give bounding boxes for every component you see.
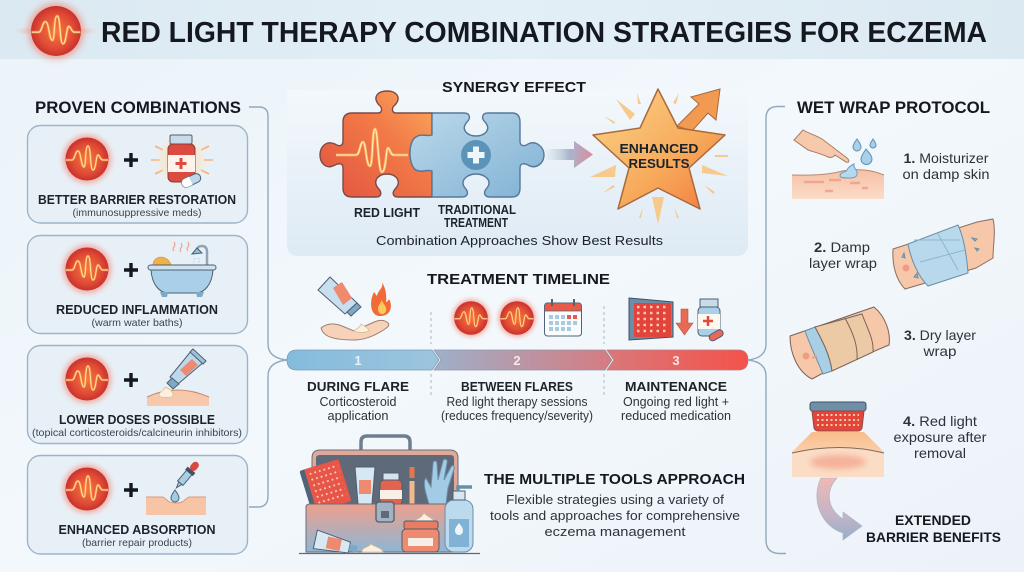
- icon: star with enhanced results: [590, 89, 728, 224]
- arrow: curved to extended benefits: [817, 478, 862, 540]
- step 1: moisturizer: 1. Moisturizer: [904, 150, 989, 166]
- heading: wet wrap protocol: WET WRAP PROTOCOL: [797, 99, 990, 117]
- step 4: red light exposure: [792, 402, 987, 477]
- icon: toolbox of treatments: [299, 436, 480, 558]
- card: lower doses possible: LOWER DOSES POSSIBLE: [59, 412, 215, 427]
- heading: treatment timeline: TREATMENT TIMELINE: [427, 271, 610, 288]
- step 4: red light exposure: exposure after: [894, 429, 987, 445]
- card: reduced inflammation: REDUCED INFLAMMATION: [56, 302, 218, 317]
- timeline stage: maintenance: reduced medication: [621, 409, 731, 423]
- icon: star with enhanced results: RESULTS: [628, 156, 690, 171]
- panel: synergy effect: [287, 79, 748, 256]
- label: traditional treatment: [438, 202, 516, 230]
- icon: blue puzzle piece: [410, 113, 544, 197]
- text block: multiple tools approach: tools and approaches for comprehensive: [490, 509, 740, 523]
- text block: multiple tools approach: [484, 471, 745, 539]
- card: reduced inflammation: (warm water baths): [92, 317, 182, 329]
- arrow: to enhanced results: [546, 141, 593, 168]
- step 3: dry layer wrap: wrap: [922, 343, 957, 359]
- timeline stage: maintenance: [621, 379, 731, 423]
- heading: synergy effect: SYNERGY EFFECT: [442, 79, 586, 96]
- timeline stage: during flare: [307, 379, 409, 423]
- icon: cream tube on skin: [147, 349, 209, 406]
- timeline bar: 1: [354, 353, 362, 368]
- icon: red light logo: [19, 3, 93, 59]
- separators: [431, 306, 604, 398]
- card: better barrier restoration: (immunosuppressive meds): [72, 207, 202, 219]
- heading: proven combinations: PROVEN COMBINATIONS: [35, 99, 241, 117]
- step 2: damp layer wrap: 2. Damp: [814, 239, 870, 255]
- step 1: moisturizer: [792, 130, 990, 199]
- icon: hand with tube and flame: [318, 277, 391, 340]
- card: lower doses possible: (topical corticosteroids/calcineurin inhibitors): [32, 427, 242, 439]
- timeline bar: [287, 350, 748, 370]
- timeline stage: during flare: Corticosteroid: [320, 395, 397, 409]
- icon: dropper on skin: [146, 459, 206, 515]
- timeline stage: between flares: (reduces frequency/severity): [441, 409, 593, 423]
- callout: extended barrier benefits: [866, 512, 1001, 545]
- text block: multiple tools approach: THE MULTIPLE TOOLS APPROACH: [484, 471, 745, 488]
- timeline stage: during flare: DURING FLARE: [307, 379, 409, 394]
- timeline bar: 2: [513, 353, 521, 368]
- step 4: red light exposure: removal: [914, 445, 966, 461]
- panel: proven combinations: [28, 99, 248, 554]
- connector: left bracket: [249, 107, 287, 507]
- icon: medicine bottle: [151, 135, 213, 189]
- step 1: moisturizer: on damp skin: [902, 166, 990, 182]
- icon: red puzzle piece: [320, 91, 432, 197]
- text block: multiple tools approach: eczema management: [544, 525, 686, 539]
- callout: extended barrier benefits: EXTENDED: [895, 512, 971, 528]
- card: better barrier restoration: BETTER BARRIER RESTORATION: [38, 192, 236, 207]
- timeline stage: between flares: Red light therapy sessions: [446, 395, 588, 409]
- panel: wet wrap protocol: [790, 99, 1001, 545]
- timeline bar: 3: [672, 353, 680, 368]
- header band: [0, 0, 1024, 59]
- timeline stage: between flares: [441, 379, 593, 423]
- timeline stage: during flare: application: [328, 409, 389, 423]
- connector: right bracket: [748, 106, 786, 554]
- step 3: dry layer wrap: 3. Dry layer: [904, 327, 976, 343]
- label: traditional treatment: TREATMENT: [444, 215, 508, 230]
- card: enhanced absorption: (barrier repair products): [82, 537, 192, 549]
- icon: star with enhanced results: ENHANCED: [620, 141, 698, 156]
- step 4: red light exposure: 4. Red light: [903, 413, 977, 429]
- label: red light: RED LIGHT: [354, 205, 420, 220]
- card: reduced inflammation: [28, 236, 248, 334]
- step 2: damp layer wrap: layer wrap: [809, 255, 877, 271]
- icon: bathtub: [148, 242, 216, 297]
- label: traditional treatment: TRADITIONAL: [438, 202, 516, 217]
- step 3: dry layer wrap: [790, 307, 976, 379]
- card: enhanced absorption: [28, 456, 248, 554]
- timeline stage: maintenance: Ongoing red light +: [623, 395, 729, 409]
- title: RED LIGHT THERAPY COMBINATION STRATEGIES FOR ECZEMA: [101, 17, 987, 49]
- icon: two red light sessions and calendar: [452, 299, 582, 337]
- card: enhanced absorption: ENHANCED ABSORPTION: [58, 522, 216, 537]
- step 2: damp layer wrap: [809, 219, 994, 289]
- timeline stage: maintenance: MAINTENANCE: [625, 379, 727, 394]
- text block: multiple tools approach: Flexible strategies using a variety of: [506, 493, 725, 507]
- card: lower doses possible: [28, 346, 248, 444]
- caption: combination approaches: Combination Approaches Show Best Results: [376, 233, 664, 248]
- callout: extended barrier benefits: BARRIER BENEFITS: [866, 529, 1001, 545]
- icon: panel, down arrow and bottle: [629, 298, 724, 342]
- timeline stage: between flares: BETWEEN FLARES: [461, 379, 573, 394]
- card: better barrier restoration: [28, 126, 248, 223]
